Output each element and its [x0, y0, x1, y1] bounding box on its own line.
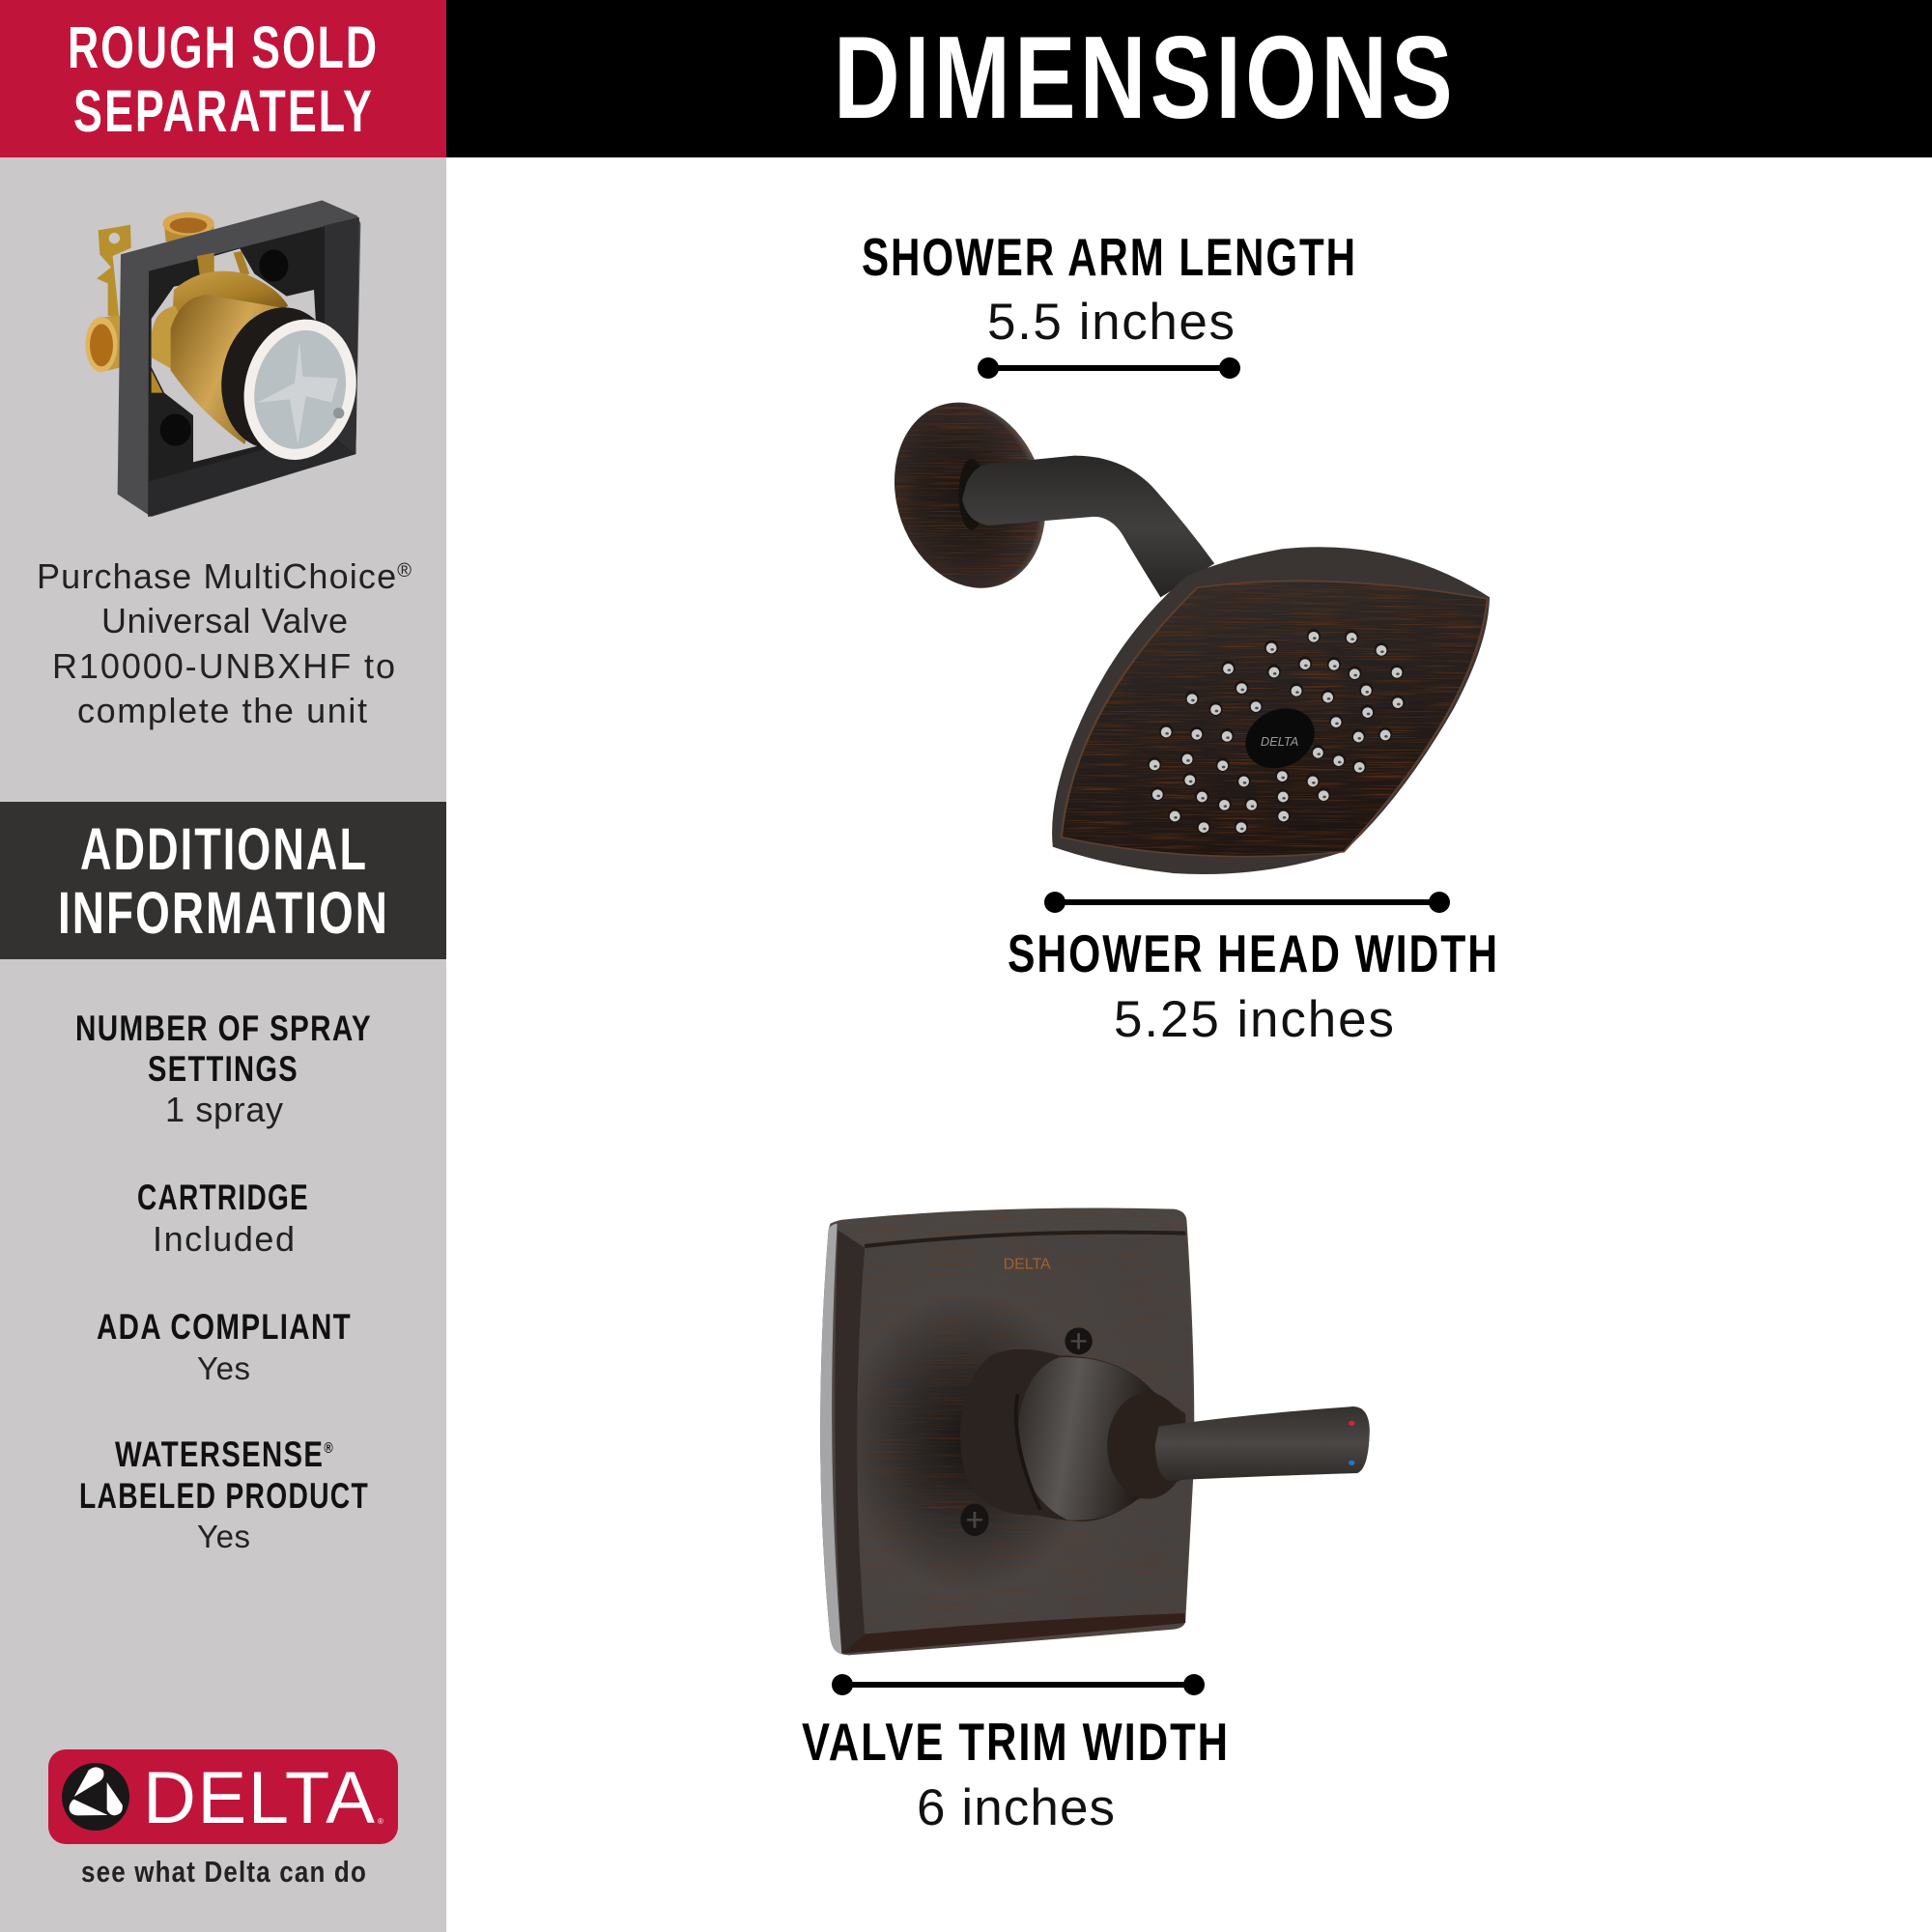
logo: delta: DELTA: [143, 1757, 375, 1839]
dimension line: shower arm: [978, 357, 1240, 379]
icon: rough-in valve photo: [85, 200, 369, 517]
text: purchase note: R10000-UNBXHF to: [52, 646, 395, 686]
spec: watersense: [79, 1435, 369, 1554]
label: shower head width: [1008, 923, 1499, 1048]
panel: left sidebar: [0, 0, 446, 1932]
icon: valve trim photo: [815, 1206, 1370, 1657]
spec: cartridge: [137, 1178, 309, 1259]
title bar: dimensions: DIMENSIONS: [834, 12, 1457, 143]
label: shower arm length: 5.5 inches: [987, 294, 1235, 351]
heading: additional information: ADDITIONAL: [80, 816, 368, 882]
text: purchase note: ®: [397, 560, 412, 582]
heading: additional information: [0, 802, 446, 959]
spec: ada compliant: ADA COMPLIANT: [97, 1307, 352, 1347]
header: rough sold separately: [0, 0, 446, 157]
spec: watersense: LABELED PRODUCT: [79, 1476, 369, 1516]
icon: shower head photo: DELTA: [1261, 735, 1298, 749]
label: shower head width: 5.25 inches: [1114, 991, 1394, 1048]
spec: cartridge: CARTRIDGE: [137, 1178, 309, 1217]
text: purchase note: Universal Valve: [101, 601, 348, 640]
label: valve trim width: [802, 1712, 1230, 1836]
spec: watersense: Yes: [197, 1519, 250, 1554]
label: shower head width: SHOWER HEAD WIDTH: [1008, 923, 1499, 983]
text: purchase note: Purchase MultiChoice: [37, 556, 396, 596]
spec: cartridge: Included: [153, 1219, 295, 1259]
spec: ada compliant: Yes: [197, 1350, 250, 1386]
spec: watersense: ®: [324, 1440, 334, 1457]
label: valve trim width: 6 inches: [917, 1779, 1115, 1836]
text: purchase note: [37, 556, 412, 730]
dimension line: shower head: [1044, 892, 1450, 913]
header: rough sold separately: ROUGH SOLD: [68, 14, 379, 80]
header: rough sold separately: SEPARATELY: [73, 78, 374, 144]
icon: shower head photo: [879, 395, 1492, 876]
logo: delta: [48, 1749, 398, 1844]
label: valve trim width: VALVE TRIM WIDTH: [802, 1712, 1230, 1772]
logo: delta: ®: [378, 1817, 384, 1826]
spec: watersense: WATERSENSE: [115, 1435, 379, 1474]
spec: ada compliant: [97, 1307, 352, 1386]
label: shower arm length: SHOWER ARM LENGTH: [862, 227, 1357, 287]
spec: spray settings: [75, 1009, 372, 1129]
spec: spray settings: 1 spray: [165, 1090, 283, 1129]
tagline: see what Delta can do: [81, 1855, 367, 1889]
icon: valve trim photo: DELTA: [1004, 1255, 1051, 1272]
spec: spray settings: NUMBER OF SPRAY: [75, 1009, 372, 1048]
heading: additional information: INFORMATION: [58, 880, 389, 946]
text: purchase note: complete the unit: [77, 691, 367, 730]
title bar: dimensions: [446, 0, 1932, 157]
spec: spray settings: SETTINGS: [148, 1049, 298, 1089]
dimension line: valve trim: [832, 1674, 1205, 1695]
label: shower arm length: [862, 227, 1357, 351]
